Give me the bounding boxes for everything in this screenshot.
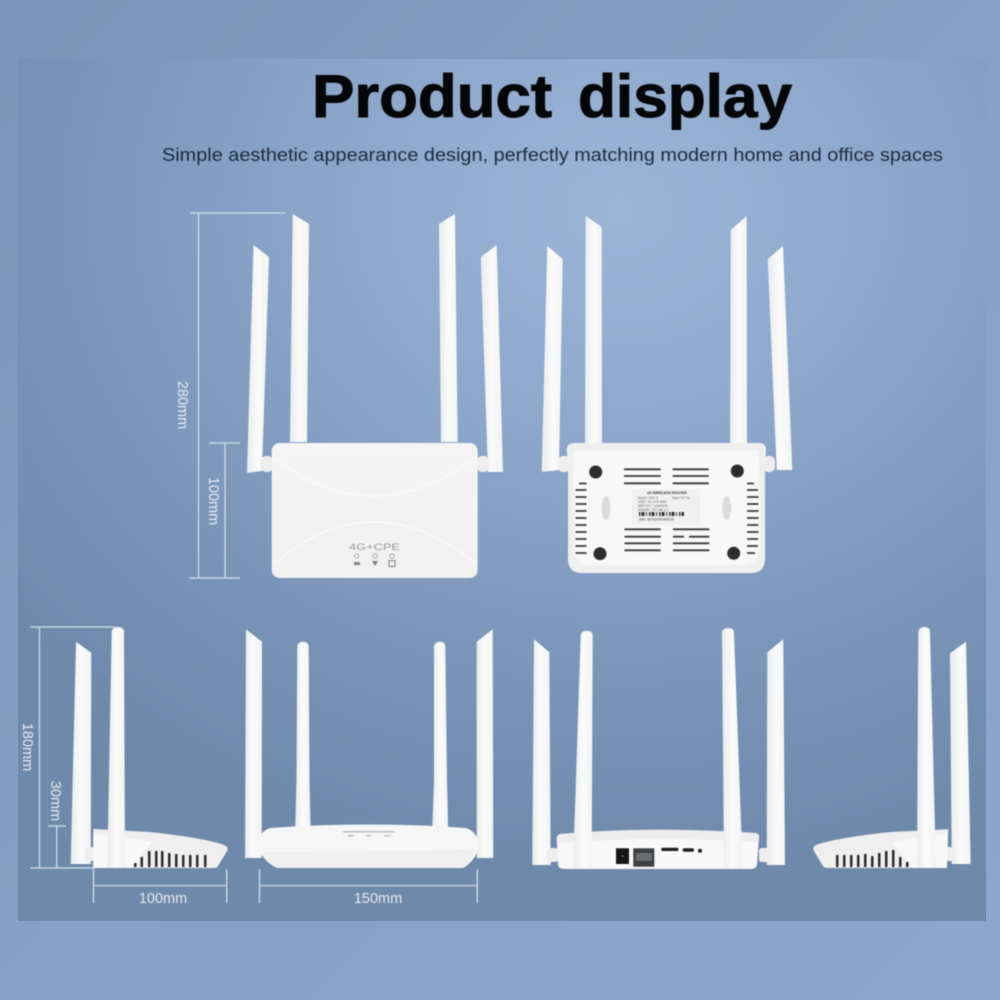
- label: 150mm: 150mm: [354, 891, 402, 907]
- base plate: [573, 451, 760, 565]
- product label: Input: 5V 1A: [672, 496, 690, 500]
- antennas: [247, 214, 503, 473]
- SIM slot: [661, 848, 678, 851]
- router front view with dimensions: [174, 213, 503, 578]
- lighter rear facet: [93, 833, 152, 868]
- barcode: [639, 512, 684, 516]
- label: 100mm: 100mm: [205, 477, 221, 525]
- antenna hinges: [558, 456, 775, 472]
- outer antennas: [532, 639, 785, 865]
- mounting keyholes: [602, 496, 731, 520]
- router rear view with ports: [532, 628, 785, 869]
- depth dimension lines: [94, 868, 227, 903]
- side vents: [134, 851, 206, 867]
- product label: Website: 192.168.1.1: [638, 508, 668, 512]
- body curves: [273, 457, 476, 564]
- product label: WiFi KEY: 12345678: [638, 504, 668, 508]
- logo: 4G+CPE: [349, 542, 400, 552]
- antennas: [542, 216, 792, 472]
- product label: Model: CPE-4: [638, 496, 658, 500]
- label: 30mm: 30mm: [47, 781, 63, 821]
- reset hole: [698, 849, 702, 853]
- body shadow band: [262, 849, 475, 868]
- router body: [567, 443, 766, 573]
- antennas: [245, 629, 493, 858]
- near antenna: [917, 627, 936, 868]
- power port: [616, 848, 629, 864]
- router edge view with width dimension: [245, 629, 493, 907]
- product label: 4G WIRELESS ROUTER: [647, 491, 687, 495]
- title: Product: [312, 63, 552, 130]
- faint front markings: [343, 831, 395, 836]
- height dimension lines: [189, 213, 285, 578]
- title: display: [578, 63, 793, 130]
- vent slots: [576, 469, 758, 553]
- far antenna: [71, 642, 91, 864]
- hinge: [85, 847, 95, 861]
- title: [312, 63, 793, 130]
- antenna hinges: [547, 848, 770, 862]
- side vents: [836, 850, 908, 867]
- product label: [632, 489, 700, 525]
- product label: SSID: 4G-CPE-WIFI: [638, 500, 667, 504]
- side view left with dimensions: [19, 627, 228, 907]
- router body: [272, 443, 478, 578]
- width dimension lines: [260, 869, 477, 903]
- far antenna: [950, 642, 971, 864]
- status icons: [354, 560, 395, 566]
- label: 180mm: 180mm: [19, 723, 35, 771]
- status LEDs: [354, 554, 394, 558]
- router body: [258, 824, 479, 868]
- router body: [813, 829, 948, 868]
- USB port: [683, 848, 694, 852]
- ethernet port: [633, 848, 654, 867]
- height dimension lines: [30, 627, 115, 868]
- product label: IMEI: 867530902468135: [639, 518, 674, 522]
- label: 280mm: 280mm: [174, 381, 190, 429]
- inner antennas: [573, 628, 743, 868]
- router body: [93, 829, 228, 868]
- lighter rear facet: [892, 833, 948, 868]
- side view right: [813, 627, 971, 868]
- label: 100mm: 100mm: [139, 891, 187, 907]
- near antenna: [107, 627, 125, 868]
- router underside view: [542, 216, 792, 573]
- top lip shading: [557, 830, 759, 843]
- antenna hinges: [261, 456, 489, 472]
- router body: [557, 830, 759, 869]
- hinge: [945, 847, 955, 861]
- subtitle: Simple aesthetic appearance design, perfectly matching modern home and office spaces: [162, 144, 943, 165]
- rubber feet: [589, 464, 744, 560]
